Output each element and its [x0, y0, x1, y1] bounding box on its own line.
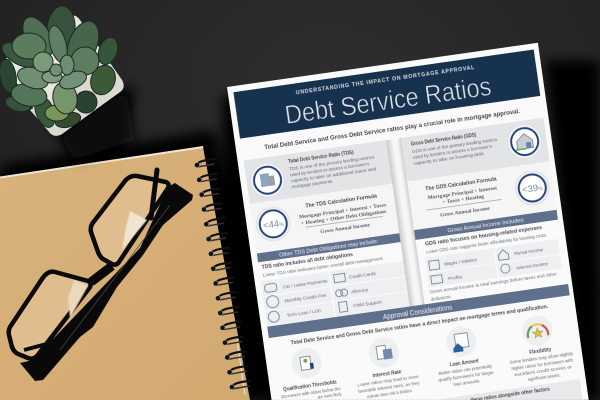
temple arms	[20, 170, 193, 381]
item: profits: Profits	[448, 274, 462, 281]
item: qualification thresholds: Borrowers with ratios below the	[281, 386, 342, 399]
title: Debt Service Ratios	[283, 73, 493, 130]
GDS formula: Mortgage Principal + Interest	[427, 185, 498, 201]
GDS description: used by lenders to assess a borrower's	[412, 144, 492, 160]
item: wages: Wages / Salaries	[444, 257, 477, 267]
item: child support: Child Support	[353, 299, 383, 308]
item: flexibility: Some lenders may allow slightly	[509, 351, 574, 365]
icon: calculator	[367, 336, 401, 369]
GDS income footnote	[430, 271, 559, 302]
infographic paper	[227, 43, 589, 400]
item: interest rate: favorable interest rates, as they	[358, 380, 421, 394]
GDS income note: Lower GDS ratio suggests better affordability for housing costs.	[426, 232, 547, 255]
TDS description: mortgage payments.	[291, 178, 334, 189]
TDS formula: Mortgage Principal + Interest + Taxes	[299, 202, 387, 221]
icon: under 44 percent ring	[254, 205, 292, 243]
icon: gauge and star	[520, 314, 554, 348]
bar: approval considerations: Approval Considerations	[383, 304, 453, 321]
item: child support	[338, 296, 383, 312]
TDS obligations heading: TDS ratio includes all debt obligations	[261, 252, 353, 271]
bar: other TDS obligations	[257, 233, 401, 262]
icon: TDS document ring	[248, 161, 287, 199]
item: flexibility	[504, 311, 577, 384]
notebook	[0, 146, 250, 400]
panel: GDS formula	[407, 161, 557, 230]
icon: under 39 percent ring: <39%	[521, 182, 544, 196]
TDS obligations note: Lower TDS ratio indicates better overall debt management.	[263, 256, 384, 278]
item: qualification thresholds: are more likely	[317, 391, 342, 400]
callout: bottom note	[433, 379, 583, 400]
item: alimony	[335, 286, 369, 297]
item: interest rate: indicate lower risk to lenders.	[367, 388, 413, 399]
item: loan amount: qualify borrowers for larger	[438, 370, 495, 383]
panel: TDS definition	[244, 140, 392, 204]
item: car lease: Car / Lease Payments	[282, 278, 328, 290]
panel: TDS formula	[250, 184, 399, 253]
TDS description	[289, 154, 378, 189]
item: alimony: Alimony	[351, 287, 369, 295]
TDS formula: + Heating + Other Debt Obligations	[301, 209, 387, 227]
icon: GDS house ring	[505, 122, 544, 161]
bar: other TDS obligations: Other TDS Debt Obligations may include:	[279, 239, 379, 259]
bar: approval considerations	[267, 284, 570, 338]
GDS description: GDS is one of the primary lending metrics	[412, 137, 497, 154]
item: flexibility: Flexibility	[529, 347, 552, 356]
icon: document and house	[444, 325, 478, 359]
subtitle: UNDERSTANDING THE IMPACT ON MORTGAGE APPROVAL	[296, 65, 476, 96]
TDS formula	[299, 202, 389, 238]
GDS heading: Gross Debt Service Ratio (GDS)	[411, 132, 477, 148]
item: loan amount: Better ratios can potentially	[438, 363, 493, 376]
spiral binding	[194, 159, 250, 390]
GDS income footnote: deductions	[431, 294, 451, 302]
item: loan amount: loan amounts.	[453, 378, 481, 387]
item: term loan: Term Loan / LOC	[286, 308, 322, 318]
panel: GDS definition	[401, 118, 550, 182]
item: credit cards: Credit Cards	[349, 271, 376, 280]
eyeglasses	[9, 170, 193, 381]
TDS formula heading: The TDS Calculation Formula	[305, 193, 378, 210]
TDS description: TDS is one of the primary lending metrics	[289, 154, 375, 172]
item: loan amount	[431, 323, 496, 389]
bridge	[91, 266, 112, 282]
GDS formula	[424, 185, 503, 221]
TDS description: capacity to take on additional loans and	[291, 166, 377, 183]
item: term loan	[268, 304, 322, 323]
item: interest rate: Interest Rate	[372, 369, 402, 379]
TDS description: used by lenders to assess a borrower's	[290, 161, 370, 177]
GDS income footnote: Gross annual income is total earnings before taxes and other	[430, 271, 558, 294]
GDS formula heading: The GDS Calculation Formula	[425, 176, 498, 193]
TDS formula: Gross Annual Income	[320, 222, 371, 235]
panel: TDS obligations grid	[261, 261, 410, 327]
icon: certificate	[290, 346, 324, 380]
item: flexibility: excellent credit scores or	[514, 364, 573, 377]
item: interest rate: Lower ratios may lead to more	[357, 374, 420, 388]
icon: under 39 percent ring	[513, 169, 552, 207]
item: interest rate	[351, 333, 422, 400]
item: qualification thresholds	[275, 344, 342, 400]
item: condo fee: Monthly Condo Fee	[284, 293, 327, 303]
item: credit cards	[334, 269, 376, 283]
panel: GDS income grid	[425, 239, 562, 288]
bar: gross annual income	[414, 210, 558, 240]
item: car lease	[264, 276, 328, 293]
icon: under 44 percent ring: <44%	[262, 218, 285, 232]
approval intro: Total Debt Service and Gross Debt Service ratios have a direct impact on mortgage terms and qualification.	[290, 304, 549, 347]
GDS formula: + Taxes + Heating	[442, 194, 485, 206]
lower lens	[9, 272, 91, 359]
bar: gross annual income: Gross Annual Income Includes:	[447, 217, 525, 234]
succulent plant	[0, 5, 121, 130]
GDS formula: Gross Annual Income	[440, 206, 491, 219]
upper lens	[91, 176, 169, 265]
plant pot	[5, 16, 135, 160]
item: loan amount: Loan Amount	[450, 358, 479, 368]
item: interest income: Interest Income	[516, 261, 549, 271]
GDS description	[412, 137, 499, 166]
GDS description: capacity to take on housing debt.	[413, 151, 485, 166]
header banner	[233, 49, 540, 139]
item: flexibility: higher ratios for borrowers with	[511, 357, 574, 371]
item: rental income: Rental Income	[514, 247, 544, 256]
item: qualification thresholds: Qualification Thresholds	[283, 379, 337, 393]
intro sentence: Total Debt Service and Gross Debt Service ratios play a crucial role in mortgage approval.	[264, 108, 521, 151]
GDS income heading: GDS ratio focuses on housing-related expenses	[425, 225, 542, 248]
item: flexibility: significant assets.	[527, 372, 561, 382]
item: condo fee	[266, 288, 328, 308]
TDS heading: Total Debt Service Ratio (TDS)	[288, 150, 354, 165]
column gutter shadow	[386, 138, 425, 306]
